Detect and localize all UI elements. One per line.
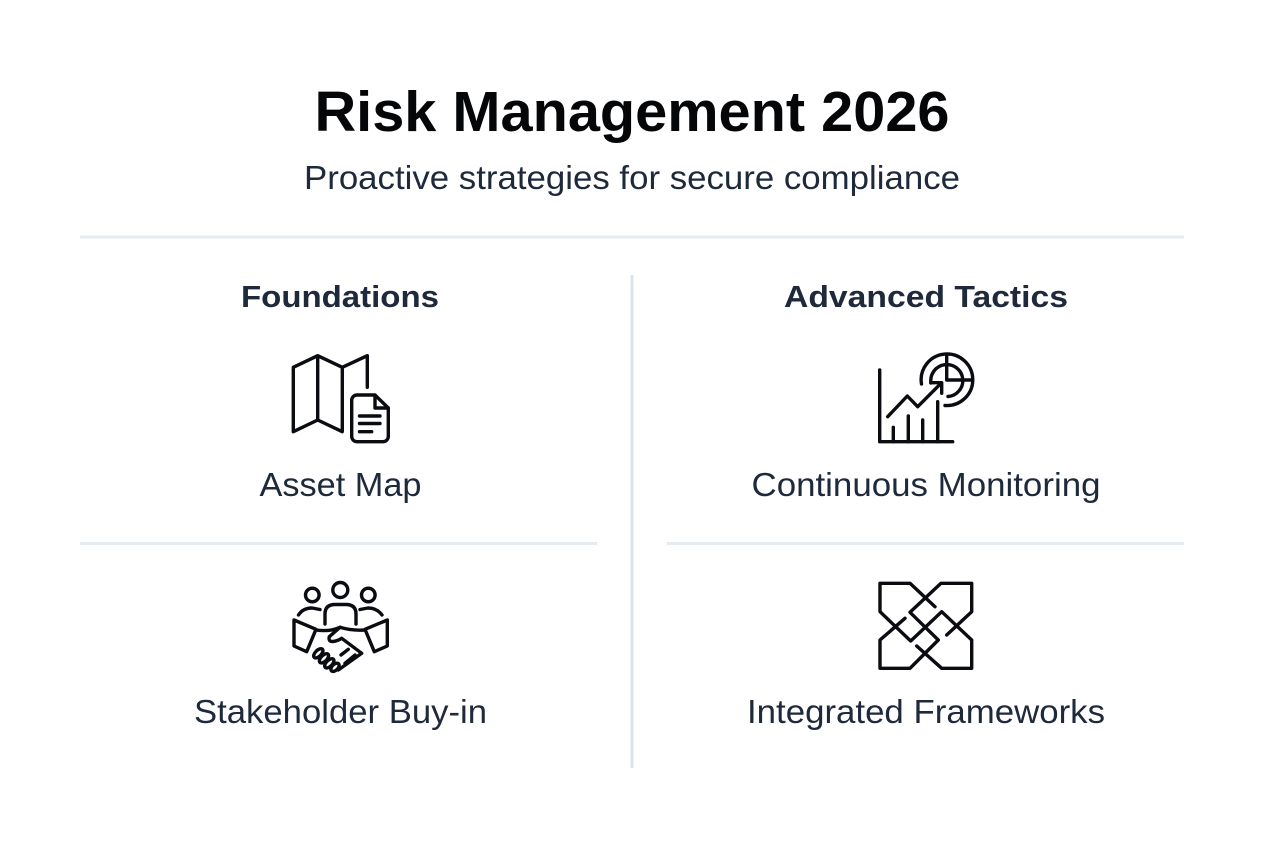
icon: map with document (293, 356, 388, 442)
subtitle: Proactive strategies for secure compliance (304, 159, 960, 196)
icon: team handshake (294, 582, 387, 673)
label: Continuous Monitoring: Continuous Monitoring (752, 466, 1100, 503)
label: Stakeholder Buy-in: Stakeholder Buy-in (194, 693, 487, 730)
icon: growth chart with target (880, 354, 973, 442)
label: Asset Map: Asset Map (260, 466, 422, 503)
label: Integrated Frameworks: Integrated Frameworks (747, 693, 1105, 730)
heading: Advanced Tactics: Advanced Tactics (784, 279, 1068, 314)
title: Risk Management 2026 (314, 80, 950, 144)
icon: interlocking frameworks (880, 583, 972, 668)
heading: Foundations: Foundations (241, 279, 439, 314)
